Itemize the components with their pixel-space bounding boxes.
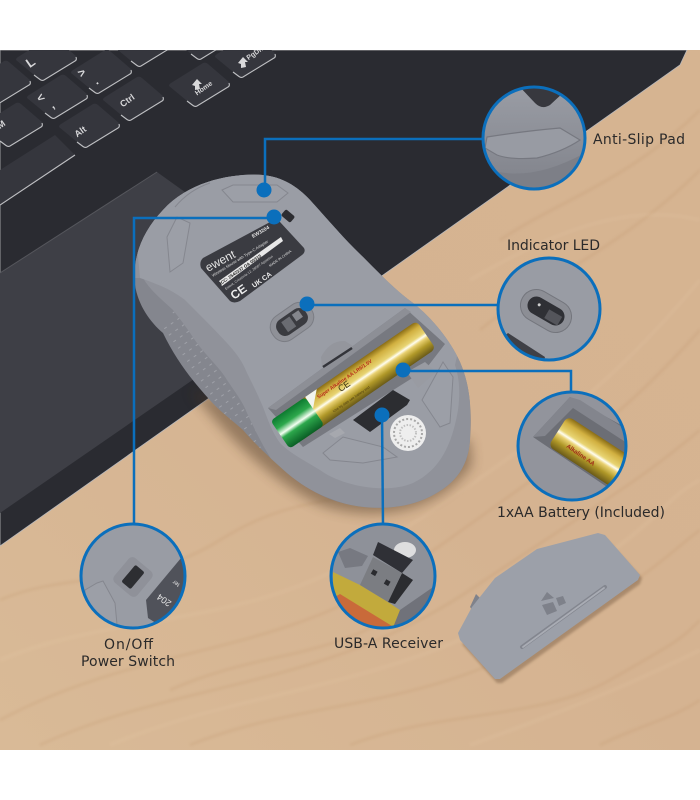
product label	[200, 220, 305, 302]
callout: indicator LED	[495, 255, 605, 365]
label: AA battery: 1xAA Battery (Included)	[497, 505, 665, 521]
magnified switch	[82, 526, 184, 626]
mouse side with dots	[164, 312, 260, 448]
magnified pad	[484, 88, 584, 188]
callout: AA battery	[516, 390, 628, 502]
loose battery cover	[458, 533, 642, 683]
power switch on mouse	[282, 210, 294, 222]
callout: anti-slip pad	[480, 85, 590, 195]
laptop keyboard keys: PgDn	[246, 46, 265, 62]
product label: ICC: 2542337 OA 00315	[219, 253, 263, 286]
optical sensor window	[270, 302, 314, 342]
magnified switch: 204	[155, 592, 173, 609]
callout lines	[134, 139, 571, 525]
product label: Wireless Mouse with Type-C Adapter	[211, 239, 270, 278]
laptop keyboard keys: Ctrl	[118, 92, 136, 109]
anti-slip pads	[167, 183, 453, 463]
battery compartment	[268, 308, 445, 447]
label: indicator LED: Indicator LED	[507, 238, 600, 254]
label: on/off power switch: On/Off	[104, 637, 153, 653]
mouse top surface	[138, 174, 459, 488]
label: USB-A receiver: USB-A Receiver	[334, 636, 443, 652]
AA battery: Use by date see battery end	[332, 385, 371, 413]
label: on/off power switch	[81, 637, 175, 670]
magnified LED window	[500, 260, 598, 358]
product label: MADE IN CHINA	[268, 249, 293, 268]
callout: USB-A receiver	[330, 524, 436, 632]
callout anchor dots	[256, 182, 410, 422]
product label: ewent	[203, 247, 238, 275]
label: on/off power switch: Power Switch	[81, 654, 175, 670]
magnified receiver	[332, 526, 434, 626]
AA battery	[270, 321, 436, 449]
laptop keyboard keys: L	[23, 54, 38, 71]
magnified battery: Alkaline AA	[565, 444, 596, 468]
laptop keyboard keys: Alt	[72, 124, 88, 139]
mouse body	[134, 175, 471, 508]
AA battery: Super Alkaline AA LR6/1.5V	[316, 358, 374, 400]
callout: on/off switch	[80, 522, 186, 635]
white warranty sticker	[390, 415, 426, 451]
product label: UK CA	[251, 271, 273, 290]
magnified switch: ter	[172, 578, 181, 587]
USB receiver in slot	[353, 390, 410, 432]
laptop keyboard keys: ,	[46, 98, 57, 111]
laptop keyboard keys	[0, 50, 276, 206]
laptop keyboard keys: Home	[194, 80, 214, 97]
laptop keyboard keys: <	[34, 90, 48, 105]
product label: EW3204	[251, 225, 271, 240]
product label: CE	[228, 281, 249, 302]
wireless mouse, underside	[130, 150, 471, 512]
laptop keyboard keys: >	[75, 65, 89, 80]
laptop body	[0, 50, 687, 546]
AA battery: CE	[336, 378, 352, 394]
mouse rim	[135, 170, 470, 512]
mouse shadow	[190, 390, 472, 514]
laptop keyboard keys: .	[90, 74, 101, 87]
label: anti-slip pad: Anti-Slip Pad	[593, 132, 685, 148]
product label: Ewent, Crisstona 12, 28007 Appleton	[224, 254, 274, 291]
